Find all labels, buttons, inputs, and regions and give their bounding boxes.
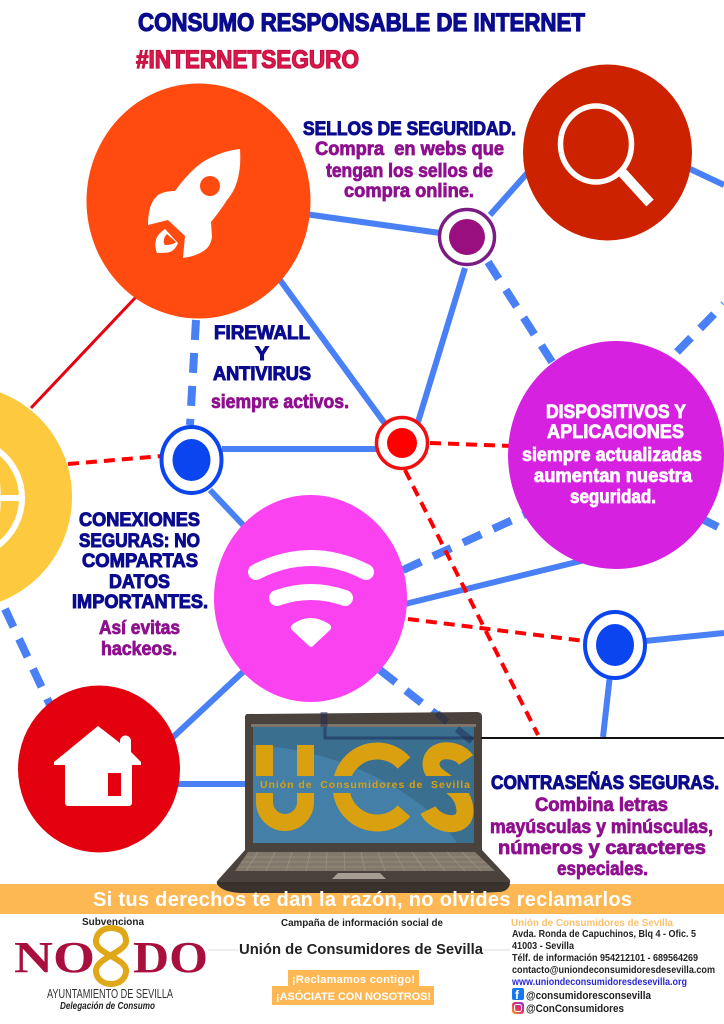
laptop lid [245,712,482,852]
laptop screen [253,727,474,843]
circle: home [18,686,180,852]
text: sellos de seguridad: SELLOS DE SEGURIDAD. [303,118,516,140]
text: sellos de seguridad: compra online. [344,180,474,202]
call to action: ¡ASÓCIATE CON NOSOTROS! [276,990,431,1003]
slogan band: Si tus derechos te dan la razón, no olvides reclamarlos [93,889,632,911]
text: contraseñas seguras: Combina letras [535,794,668,816]
icon: rocket [148,149,240,258]
text: conexiones seguras: DATOS [109,571,170,593]
campaign text [239,918,484,958]
text: contraseñas seguras: números y caracteres [498,837,706,859]
contact block: www.uniondeconsumidoresdesevilla.org [511,976,687,988]
laptop [217,712,510,893]
logo: NO8DO: Delegación de Consumo [60,1000,155,1012]
text: dispositivos y aplicaciones: DISPOSITIVOS Y [546,401,686,423]
subvenciona label: Subvenciona [82,917,144,928]
node: blue right [585,612,645,678]
text: dispositivos y aplicaciones: aumentan nuestra [534,465,692,487]
icon: facebook: f [515,988,520,1002]
campaign text: Unión de Consumidores de Sevilla [239,942,484,958]
text: dispositivos y aplicaciones: APLICACIONES [547,421,684,443]
circle: devices [508,341,724,569]
icon: globe [0,439,22,557]
facebook handle: @consumidoresconsevilla [526,990,652,1002]
laptop screen: Unión de Consumidores de Sevilla [260,779,470,791]
text: dispositivos y aplicaciones: seguridad. [570,486,656,508]
circle: globe [0,385,72,609]
text: conexiones seguras: IMPORTANTES. [72,591,208,613]
title: CONSUMO RESPONSABLE DE INTERNET [138,9,585,37]
text: conexiones seguras [72,509,208,660]
text: sellos de seguridad: tengan los sellos de [326,160,493,182]
icon: magnifying glass [560,106,650,203]
circle: rocket [86,84,310,318]
text: firewall y antivirus: Y [255,343,269,365]
text: conexiones seguras: COMPARTAS [82,550,198,572]
icon: facebook [512,988,524,1002]
icon: house [54,726,141,806]
text: firewall y antivirus [211,322,349,413]
node: red [376,418,428,468]
text: firewall y antivirus: FIREWALL [214,322,310,344]
text: sellos de seguridad [303,118,516,202]
trackpad [332,873,386,879]
slogan band [0,884,724,914]
call to action [272,970,434,1005]
text: sellos de seguridad: Compra en webs que [315,138,504,160]
text: contraseñas seguras [490,771,719,880]
text: contraseñas seguras: especiales. [557,858,648,880]
node: blue left [162,427,222,493]
text: conexiones seguras: SEGURAS: NO [79,530,200,552]
network lines [5,168,724,784]
logo: NO8DO [14,928,208,1012]
text: conexiones seguras: hackeos. [101,638,177,660]
circle: wifi [214,495,407,702]
logo: NO8DO: DO [133,933,208,982]
logo: NO8DO: NO [14,933,95,982]
black line [481,737,724,739]
contact block: 41003 - Sevilla [512,940,574,952]
text: firewall y antivirus: siempre activos. [211,391,349,413]
text: dispositivos y aplicaciones [522,401,702,508]
hashtag: #INTERNETSEGURO [136,46,359,74]
instagram handle: @ConConsumidores [526,1003,624,1015]
text: conexiones seguras: CONEXIONES [79,509,200,531]
contact block: Télf. de información 954212101 - 689564269 [512,952,698,964]
keyboard [235,852,495,871]
text: conexiones seguras: Así evitas [99,617,180,639]
call to action: ¡Reclamamos contigo! [292,974,415,986]
icon: wifi [256,558,366,647]
text: dispositivos y aplicaciones: siempre actualizadas [522,444,702,466]
laptop base [217,850,510,893]
contact block: Avda. Ronda de Capuchinos, Blq 4 - Ofic. 5 [512,928,696,940]
text: firewall y antivirus: ANTIVIRUS [213,363,311,385]
node: purple [440,210,494,264]
circle: magnifier [523,64,692,240]
campaign text: Campaña de información social de [281,918,443,929]
contact block [511,917,715,988]
logo: NO8DO: AYUNTAMIENTO DE SEVILLA [47,986,173,1001]
icon: instagram [512,1002,524,1014]
contact block: Unión de Consumidores de Sevilla [511,917,673,929]
